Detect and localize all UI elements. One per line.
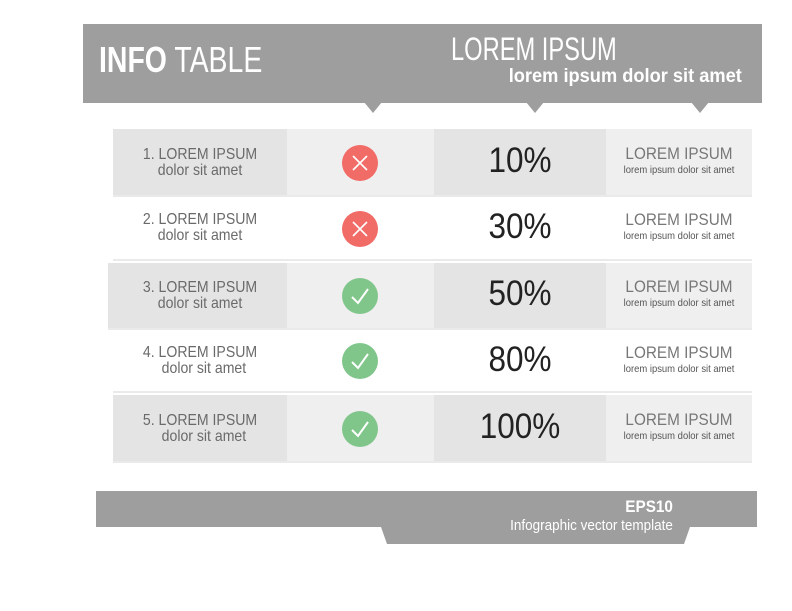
row 3: 3. LOREM IPSUM	[143, 279, 257, 296]
row 4: dolor sit amet	[162, 360, 246, 377]
row 5: LOREM IPSUM	[625, 410, 733, 429]
row 2: 30%	[488, 207, 552, 246]
title: INFO TABLE	[99, 39, 262, 80]
row 3: 50%	[488, 274, 552, 313]
row 4: 80%	[488, 340, 552, 379]
row 5: dolor sit amet	[162, 428, 246, 445]
row 1: dolor sit amet	[158, 162, 242, 179]
header subheading: lorem ipsum dolor sit amet	[509, 66, 742, 87]
row 3: dolor sit amet	[158, 295, 242, 312]
row 5: 100%	[480, 407, 560, 446]
icon: check	[342, 343, 378, 379]
footer text	[510, 497, 673, 534]
row 2: dolor sit amet	[158, 227, 242, 244]
row 2: lorem ipsum dolor sit amet	[624, 230, 734, 242]
row 4: 4. LOREM IPSUM	[143, 344, 257, 361]
icon: check	[342, 278, 378, 314]
row 5: lorem ipsum dolor sit amet	[624, 430, 734, 442]
row 5	[113, 395, 752, 463]
row 1: 1. LOREM IPSUM	[143, 146, 257, 163]
row 2	[113, 199, 752, 261]
header heading: LOREM IPSUM	[451, 31, 617, 67]
header banner	[83, 24, 762, 103]
footer text: EPS10	[625, 497, 673, 516]
icon: cross	[342, 211, 378, 247]
row 2: 2. LOREM IPSUM	[143, 211, 257, 228]
icon: check	[342, 411, 378, 447]
row 5: 5. LOREM IPSUM	[143, 412, 257, 429]
row 1: LOREM IPSUM	[625, 144, 733, 163]
pointer arrows	[365, 103, 708, 113]
row 4: LOREM IPSUM	[625, 343, 733, 362]
footer banner	[96, 491, 757, 544]
row 1: 10%	[488, 141, 552, 180]
row 3: lorem ipsum dolor sit amet	[624, 297, 734, 309]
row 2: LOREM IPSUM	[625, 210, 733, 229]
row 3	[108, 263, 752, 330]
row 3: LOREM IPSUM	[625, 277, 733, 296]
row 1	[113, 129, 752, 197]
row 4: lorem ipsum dolor sit amet	[624, 363, 734, 375]
icon: cross	[342, 145, 378, 181]
row 4	[113, 332, 752, 393]
row 1: lorem ipsum dolor sit amet	[624, 164, 734, 176]
footer text: Infographic vector template	[510, 517, 673, 534]
